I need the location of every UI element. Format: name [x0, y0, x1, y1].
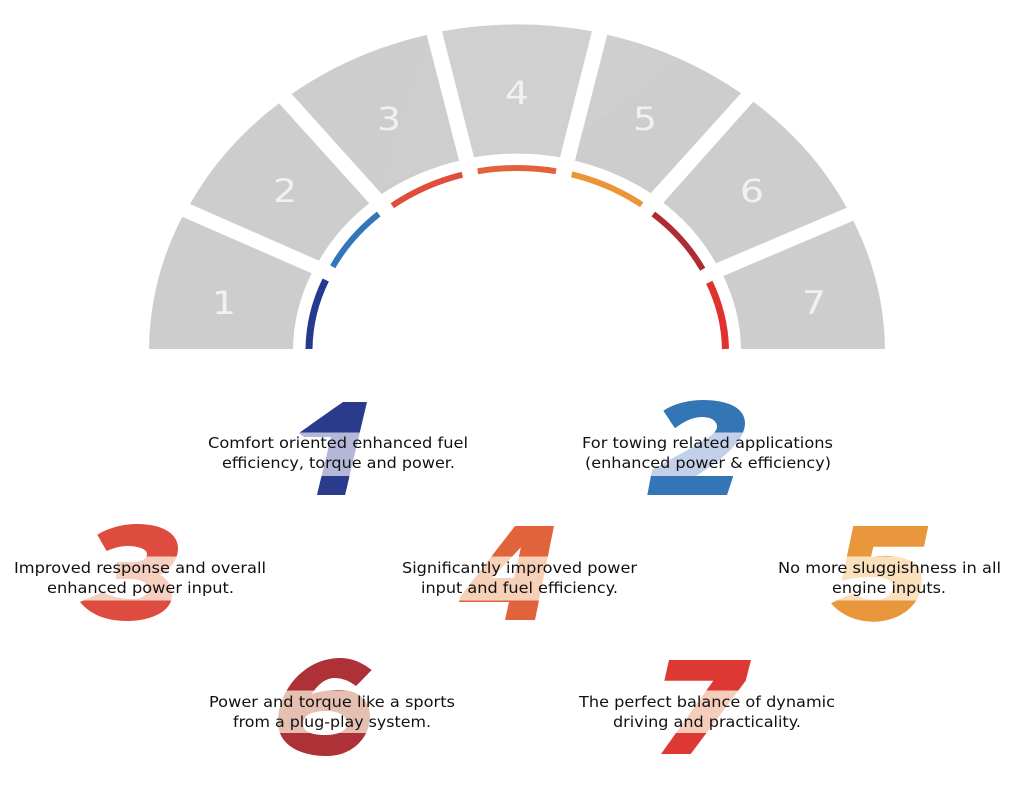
segment 4: 4: [505, 74, 529, 112]
item 5: engine inputs.: [832, 579, 946, 597]
segment 6: [663, 102, 847, 263]
item 3: [16, 524, 264, 621]
segment 7: 7: [802, 284, 826, 322]
segment 2: 2: [273, 172, 297, 210]
segment 4: [442, 24, 592, 157]
item 4: Significantly improved power: [402, 559, 638, 577]
item 5: [780, 526, 1000, 622]
item 2: (enhanced power & efficiency): [585, 454, 831, 472]
item 4: input and fuel efficiency.: [421, 579, 618, 597]
segment 5: 5: [633, 100, 657, 138]
item 5: 5: [833, 502, 925, 644]
segment 6: 6: [740, 172, 764, 210]
segment 1: 1: [212, 284, 236, 322]
item 5: No more sluggishness in all: [778, 559, 1001, 577]
item 3: 3: [81, 502, 176, 644]
arc 5: [572, 174, 642, 205]
item 7: The perfect balance of dynamic: [578, 693, 835, 711]
item 6: from a plug-play system.: [233, 713, 431, 731]
segment 7: [723, 221, 885, 349]
segment 3: 3: [377, 100, 401, 138]
item 2: [584, 400, 832, 495]
item 6: Power and torque like a sports: [209, 693, 455, 711]
arc 1: [309, 280, 326, 349]
item 7: 7: [656, 636, 746, 778]
arc 3: [392, 175, 462, 206]
segment 1: [149, 217, 312, 349]
item 4: 4: [462, 502, 553, 644]
item 4: [403, 526, 637, 620]
item 1: efficiency, torque and power.: [222, 454, 455, 472]
item 7: driving and practicality.: [613, 713, 801, 731]
arc 2: [333, 214, 379, 267]
item 2: For towing related applications: [582, 434, 833, 452]
item 3: enhanced power input.: [47, 579, 234, 597]
arc 7: [709, 282, 726, 349]
item 1: 1: [291, 377, 376, 519]
item 7: [578, 660, 834, 754]
item 1: [208, 402, 466, 495]
arc 6: [653, 214, 703, 269]
item 6: [210, 658, 454, 756]
item 2: 2: [651, 377, 742, 519]
segment 2: [190, 103, 369, 261]
segment 5: [575, 35, 741, 193]
item 6: 6: [280, 637, 373, 779]
arc 4: [478, 168, 556, 171]
item 1: Comfort oriented enhanced fuel: [208, 434, 468, 452]
item 3: Improved response and overall: [14, 559, 266, 577]
segment 3: [292, 35, 459, 194]
gauge: grey segments and coloured arcs: [149, 24, 885, 349]
